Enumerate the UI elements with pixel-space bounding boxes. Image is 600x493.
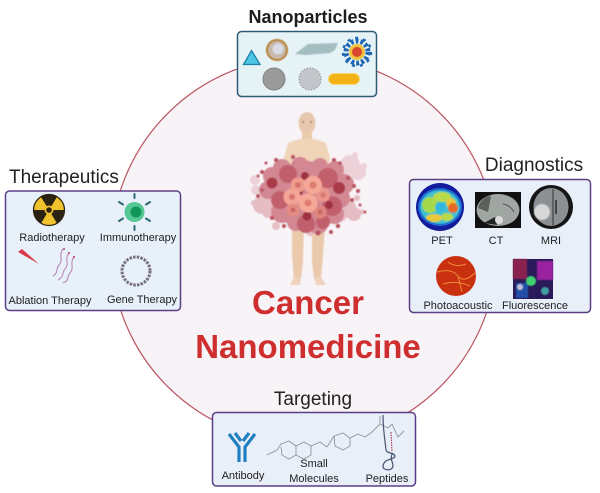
panel: therapeutics — [6, 191, 180, 310]
tumor mass — [250, 152, 367, 236]
icon: mesoporous sphere — [299, 68, 321, 90]
image: photoacoustic — [436, 256, 476, 296]
large pink cells — [290, 178, 306, 192]
scattered small cells — [256, 155, 366, 236]
icon: laser — [18, 249, 39, 264]
label: Photoacoustic: Photoacoustic — [423, 300, 493, 312]
chemical structure — [267, 416, 404, 459]
label: Antibody: Antibody — [222, 470, 265, 482]
central figure with tumor — [250, 112, 367, 285]
icon: radiation — [34, 194, 64, 226]
icon: antibody — [229, 433, 255, 462]
label: Peptides: Peptides — [366, 473, 409, 485]
label: Immunotherapy: Immunotherapy — [100, 232, 177, 244]
label: Small Molecules: Molecules — [289, 473, 339, 485]
image: PET — [416, 183, 464, 231]
label: MRI: MRI — [541, 235, 561, 247]
mid lobes — [259, 157, 354, 234]
icon: metal sphere — [263, 68, 285, 90]
panel: diagnostics — [410, 180, 590, 312]
label: Small Molecules: Small — [300, 458, 328, 470]
image: fluorescence — [513, 259, 553, 299]
icon: graphene sheet — [295, 43, 338, 55]
label: Radiotherapy: Radiotherapy — [19, 232, 85, 244]
label: Ablation Therapy: Ablation Therapy — [9, 295, 92, 307]
label: Small Molecules — [289, 458, 339, 485]
heading: Therapeutics: Therapeutics — [9, 167, 119, 188]
icon: peptide — [383, 415, 395, 470]
panel: targeting — [212, 412, 416, 486]
label: Gene Therapy: Gene Therapy — [107, 294, 178, 306]
heading: Nanoparticles: Nanoparticles — [248, 7, 368, 27]
background circle — [111, 57, 497, 443]
human body — [284, 112, 330, 285]
icon: triangle — [244, 50, 260, 64]
icon: liposome — [267, 40, 287, 60]
icon: heat waves — [53, 248, 75, 283]
image: MRI — [529, 185, 573, 229]
title: Cancer Nanomedicine: Nanomedicine — [195, 328, 421, 365]
label: PET: PET — [431, 235, 453, 247]
heading: Targeting: Targeting — [274, 389, 352, 410]
icon: dendrimer — [343, 38, 371, 66]
label: Fluorescence: Fluorescence — [502, 300, 568, 312]
icon: immune cell — [119, 194, 150, 230]
icon: capsule — [328, 74, 360, 84]
image: CT — [475, 192, 521, 228]
panel: nanoparticles — [238, 32, 376, 96]
pale outer lobes — [250, 152, 367, 195]
title: Cancer Nanomedicine: Cancer — [252, 284, 364, 321]
icon: gene ring — [122, 257, 150, 285]
dark cells — [266, 178, 278, 188]
title: Cancer Nanomedicine — [195, 284, 421, 365]
heading: Diagnostics: Diagnostics — [485, 155, 583, 176]
label: CT: CT — [489, 235, 504, 247]
